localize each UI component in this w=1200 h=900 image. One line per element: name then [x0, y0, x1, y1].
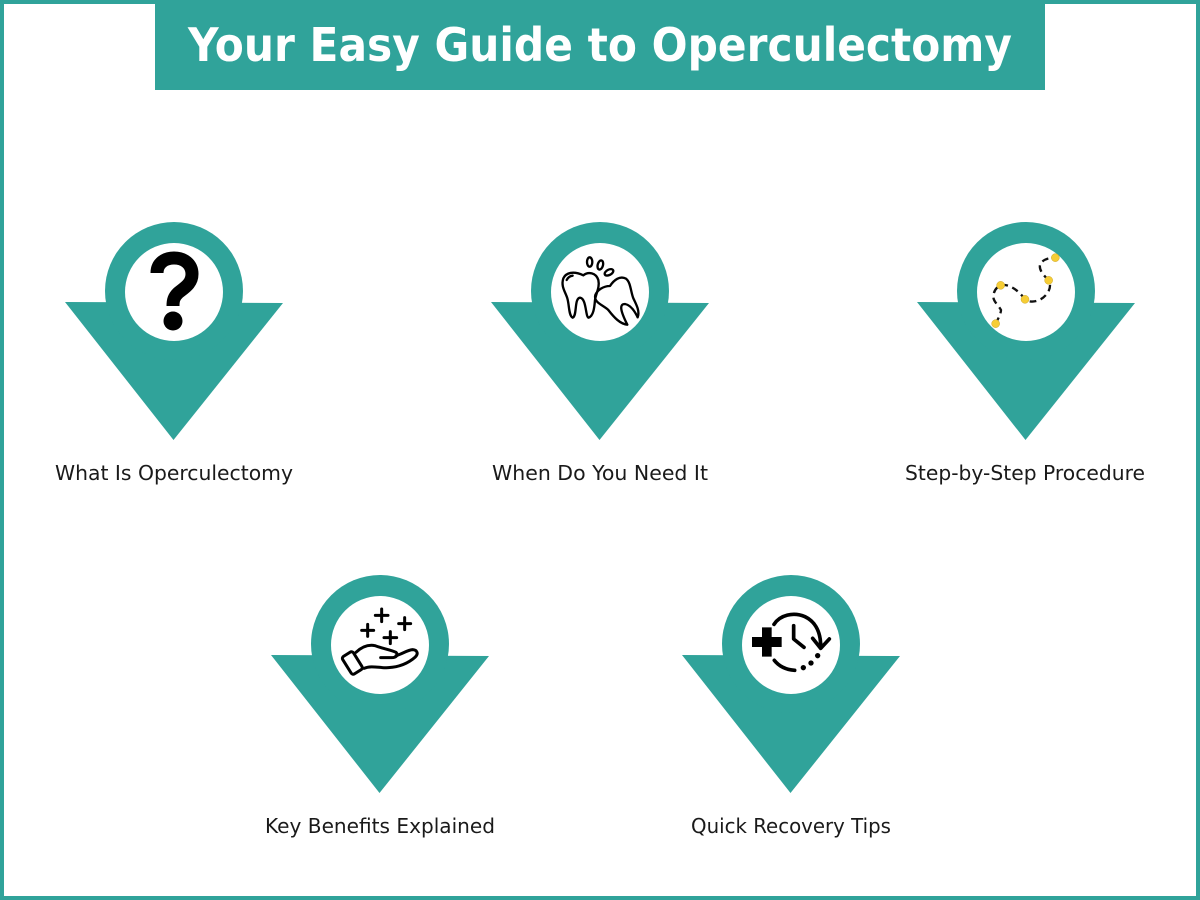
icon: dotted route — [992, 254, 1059, 328]
title: Your Easy Guide to Operculectomy — [187, 18, 1012, 72]
pin marker 4 — [271, 575, 489, 793]
icon: hand with plus signs — [341, 609, 417, 675]
pin marker 1 — [65, 222, 283, 440]
icon: medical cross and clock — [752, 614, 829, 670]
pin marker 5 — [682, 575, 900, 793]
label: Key Benefits Explained: Key Benefits Explained — [265, 814, 495, 838]
pin marker 2 — [491, 222, 709, 440]
panel: When Do You Need It — [491, 222, 709, 485]
label: When Do You Need It: When Do You Need It — [492, 461, 708, 485]
label: What Is Operculectomy: What Is Operculectomy — [55, 461, 293, 485]
icon: question mark — [157, 258, 192, 330]
panel: What Is Operculectomy — [55, 222, 293, 485]
label: Step-by-Step Procedure: Step-by-Step Procedure — [905, 461, 1145, 485]
panel: Key Benefits Explained — [265, 575, 495, 838]
panel: Step-by-Step Procedure — [905, 222, 1145, 485]
title banner — [155, 0, 1045, 90]
panel: Quick Recovery Tips — [682, 575, 900, 838]
label: Quick Recovery Tips: Quick Recovery Tips — [691, 814, 891, 838]
icon: teeth — [563, 257, 638, 325]
pin marker 3 — [917, 222, 1135, 440]
